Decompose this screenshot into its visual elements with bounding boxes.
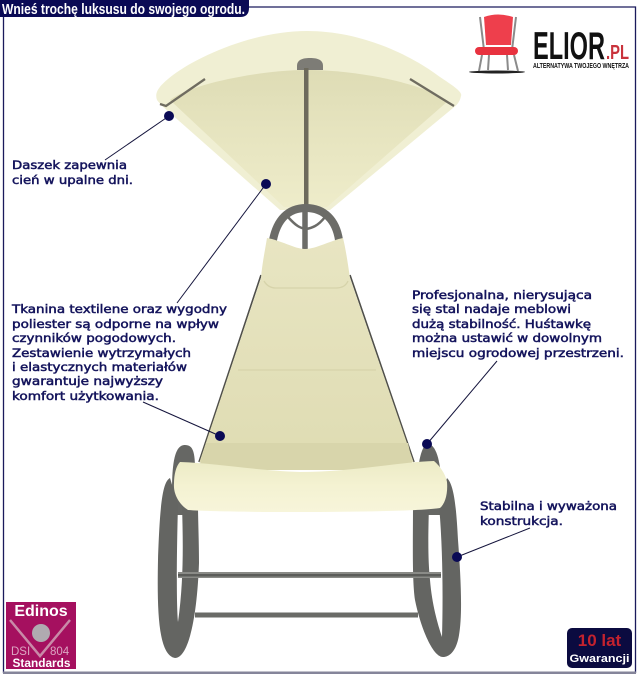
- callout: fabric: i elastycznych materiałów: [12, 360, 187, 374]
- badge: Edinos standards: 804: [50, 646, 70, 658]
- callout: canopy shade: cień w upalne dni.: [12, 173, 133, 187]
- rear rocker tops: [172, 444, 441, 515]
- logo: Elior.pl: [469, 14, 629, 74]
- rear frame arch: [273, 207, 339, 250]
- badge: Edinos standards: DSI: [11, 646, 30, 658]
- callout: fabric: komfort użytkowania.: [12, 389, 159, 403]
- title bar: Wnieś trochę luksusu do swojego ogrodu.: [2, 1, 245, 18]
- callout: stable construction: [452, 499, 617, 562]
- rocker loops: [158, 478, 461, 658]
- callout: fabric: [11, 179, 271, 441]
- badge: 10 year guarantee: Gwarancji: [570, 653, 630, 665]
- callout: steel: [412, 288, 624, 449]
- callout: fabric: poliester są odporne na wpływ: [12, 317, 219, 331]
- callout: steel: dużą stabilność. Huśtawkę: [412, 317, 591, 331]
- callout: fabric: Tkanina textilene oraz wygodny: [11, 302, 227, 316]
- callout: steel: miejscu ogrodowej przestrzeni.: [412, 346, 624, 360]
- callout: steel: się stal nadaje meblowi: [412, 302, 571, 316]
- badge: 10 year guarantee: [567, 628, 632, 668]
- backrest cushion: [198, 238, 414, 470]
- canopy: [156, 31, 461, 210]
- logo: Elior.pl: .PL: [606, 42, 629, 64]
- callout: fabric: gwarantuje najwyższy: [12, 374, 163, 388]
- seat cushion: [174, 461, 447, 512]
- callout: stable construction: konstrukcja.: [480, 514, 563, 528]
- badge: Edinos standards: [6, 602, 76, 670]
- callout: canopy shade: [12, 111, 174, 187]
- badge: Edinos standards: Edinos: [14, 603, 68, 620]
- callout: steel: można ustawić w dowolnym: [412, 331, 602, 345]
- callout: canopy shade: Daszek zapewnia: [12, 158, 127, 172]
- swing chair product: [156, 31, 461, 658]
- callout: steel: Profesjonalna, nierysująca: [412, 288, 592, 302]
- callout: fabric: Zestawienie wytrzymałych: [12, 346, 191, 360]
- badge: 10 year guarantee: 10 lat: [578, 631, 622, 650]
- icon: red chair: [469, 14, 525, 74]
- callout: stable construction: Stabilna i wyważona: [480, 499, 617, 513]
- badge: Edinos standards: Standards: [12, 658, 70, 670]
- callout: fabric: czynników pogodowych.: [12, 331, 176, 345]
- crossbars: [178, 572, 441, 618]
